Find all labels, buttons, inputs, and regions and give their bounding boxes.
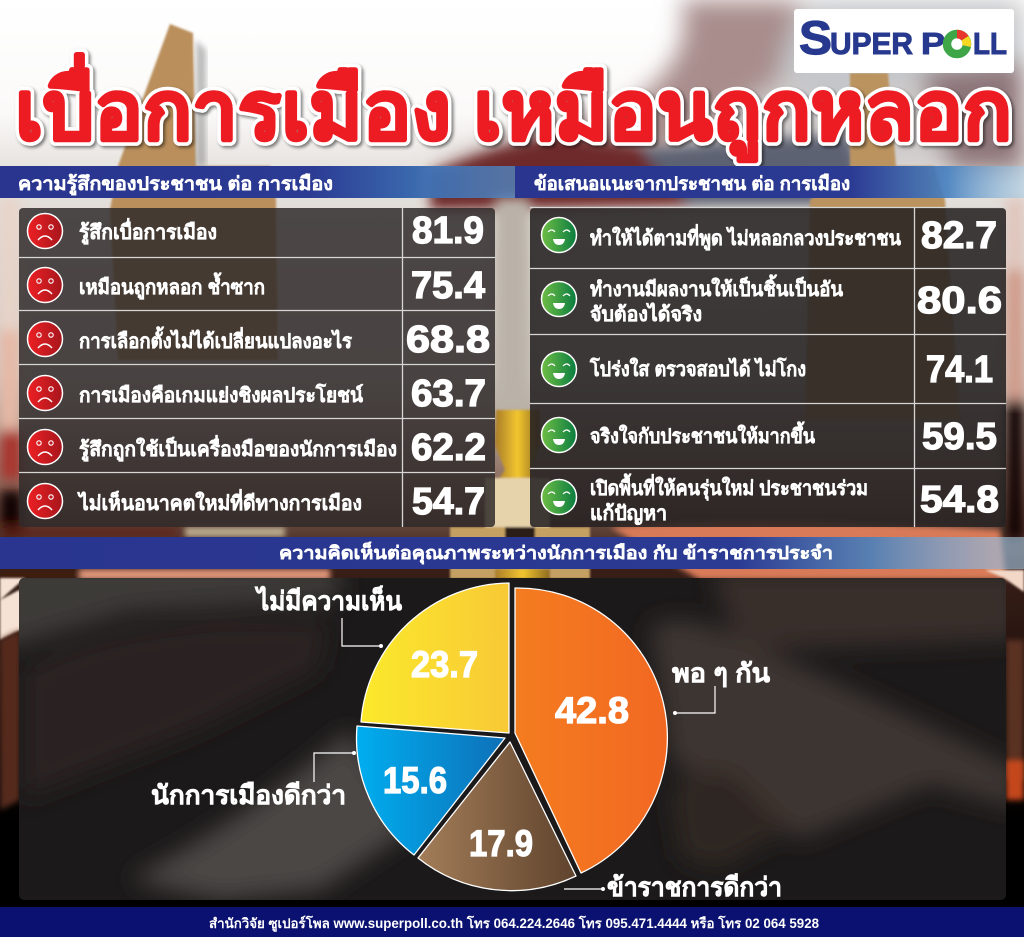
row: bored: 81.9 bbox=[412, 210, 484, 252]
logo: Super Poll: S bbox=[799, 11, 832, 64]
slice: no opinion 23.7 bbox=[361, 583, 509, 733]
row: election changes nothing bbox=[28, 319, 490, 361]
slice: same 42.8: 42.8 bbox=[555, 690, 629, 731]
logo: Super Poll: UPER bbox=[830, 26, 913, 61]
row: tangible results bbox=[542, 274, 1002, 326]
row: election changes nothing: 68.8 bbox=[406, 319, 490, 361]
heading bar: feelings bbox=[0, 166, 515, 198]
logo: Super Poll: P bbox=[921, 26, 945, 61]
heading bar: feelings: ความรู้สึกของประชาชน ต่อ การเมือง bbox=[18, 173, 333, 196]
logo: Super Poll: LL bbox=[973, 26, 1007, 61]
row: keep promises: 82.7 bbox=[921, 215, 997, 257]
row: open space for new generation: 54.8 bbox=[920, 479, 999, 521]
label: politicians better bbox=[151, 751, 356, 810]
label: politicians better: นักการเมืองดีกว่า bbox=[151, 780, 346, 810]
row: tangible results: จับต้องได้จริง bbox=[590, 302, 702, 326]
row: politics is a game: 63.7 bbox=[411, 373, 486, 415]
row: open space for new generation: แก้ปัญหา bbox=[590, 502, 667, 525]
slice: officials better 17.9: 17.9 bbox=[469, 823, 533, 864]
heading bar: suggestions: ข้อเสนอแนะจากประชาชน ต่อ การเมือง bbox=[534, 173, 850, 195]
hand shapes behind panel bbox=[0, 560, 1020, 900]
pie chart bbox=[357, 583, 667, 891]
row: open space for new generation bbox=[542, 473, 999, 525]
row: no good future: ไม่เห็นอนาคตใหม่ที่ดีทางการเมือง bbox=[77, 488, 362, 515]
row: used as a tool: 62.2 bbox=[411, 427, 486, 469]
slice: same 42.8 bbox=[515, 588, 667, 873]
panel: pie chart section bbox=[0, 560, 1020, 900]
row: politics is a game bbox=[28, 373, 486, 415]
row: deceived bbox=[28, 265, 485, 307]
row: sincere: จริงใจกับประชาชนให้มากขึ้น bbox=[590, 421, 815, 448]
logo: Super Poll bbox=[794, 9, 1014, 73]
heading bar: quality opinion: ความคิดเห็นต่อคุณภาพระหว่างนักการเมือง กับ ข้าราชการประจำ bbox=[279, 541, 833, 565]
slice: politicians better 15.6: 15.6 bbox=[383, 760, 447, 801]
row: politics is a game: การเมืองคือเกมแย่งชิงผลประโยชน์ bbox=[79, 383, 363, 407]
title: เบื่อการเมือง เหมือนถูกหลอก bbox=[15, 53, 1012, 162]
panel: suggestions table bbox=[530, 208, 1006, 527]
footer bbox=[0, 907, 1024, 937]
row: used as a tool: รู้สึกถูกใช้เป็นเครื่องมือของนักการเมือง bbox=[79, 434, 397, 463]
row: tangible results: ทำงานมีผลงานให้เป็นชิ้นเป็นอัน bbox=[590, 274, 843, 301]
row: no good future bbox=[28, 481, 485, 523]
row: transparent: โปร่งใส ตรวจสอบได้ ไม่โกง bbox=[589, 357, 806, 381]
row: sincere bbox=[542, 416, 997, 458]
slice: no opinion 23.7: 23.7 bbox=[411, 644, 478, 685]
title: เบื่อการเมือง เหมือนถูกหลอก bbox=[15, 53, 1012, 162]
row: deceived: เหมือนถูกหลอก ช้ำซาก bbox=[79, 272, 265, 301]
fabric bands bbox=[430, 0, 1024, 170]
label: no opinion bbox=[254, 585, 402, 648]
label: same: พอ ๆ กัน bbox=[672, 658, 770, 688]
row: bored: รู้สึกเบื่อการเมือง bbox=[79, 217, 217, 246]
label: no opinion: ไม่มีความเห็น bbox=[254, 585, 402, 616]
label: officials better: ข้าราชการดีกว่า bbox=[607, 872, 782, 902]
heading bar: quality opinion bbox=[0, 537, 1024, 569]
row: election changes nothing: การเลือกตั้งไม่ได้เปลี่ยนแปลงอะไร bbox=[79, 326, 352, 353]
footer: สำนักวิจัย ซูเปอร์โพล www.superpoll.co.th โทร 064.224.2646 โทร 095.471.4444 หรือ โทร 02 064 5928 bbox=[209, 914, 819, 932]
row: keep promises: ทำให้ได้ตามที่พูด ไม่หลอกลวงประชาชน bbox=[590, 223, 901, 252]
slice: officials better 17.9 bbox=[418, 742, 576, 891]
spires bbox=[110, 24, 960, 420]
row: no good future: 54.7 bbox=[412, 481, 485, 523]
row: transparent: 74.1 bbox=[926, 349, 993, 391]
side skin and flag patches bbox=[0, 198, 1024, 540]
panel: feelings table bbox=[19, 208, 495, 527]
row: open space for new generation: เปิดพื้นที่ให้คนรุ่นใหม่ ประชาชนร่วม bbox=[590, 473, 868, 501]
icon: poll donut bbox=[947, 30, 971, 54]
row: transparent bbox=[542, 349, 993, 391]
row: sincere: 59.5 bbox=[922, 416, 997, 458]
label: same bbox=[672, 658, 770, 715]
heading bar: suggestions bbox=[515, 166, 1024, 198]
slice: politicians better 15.6 bbox=[357, 726, 505, 855]
row: deceived: 75.4 bbox=[411, 265, 485, 307]
row: used as a tool bbox=[28, 427, 486, 469]
row: keep promises bbox=[542, 215, 997, 257]
row: bored bbox=[28, 210, 484, 252]
central monument bbox=[450, 410, 590, 579]
row: tangible results: 80.6 bbox=[917, 280, 1002, 322]
